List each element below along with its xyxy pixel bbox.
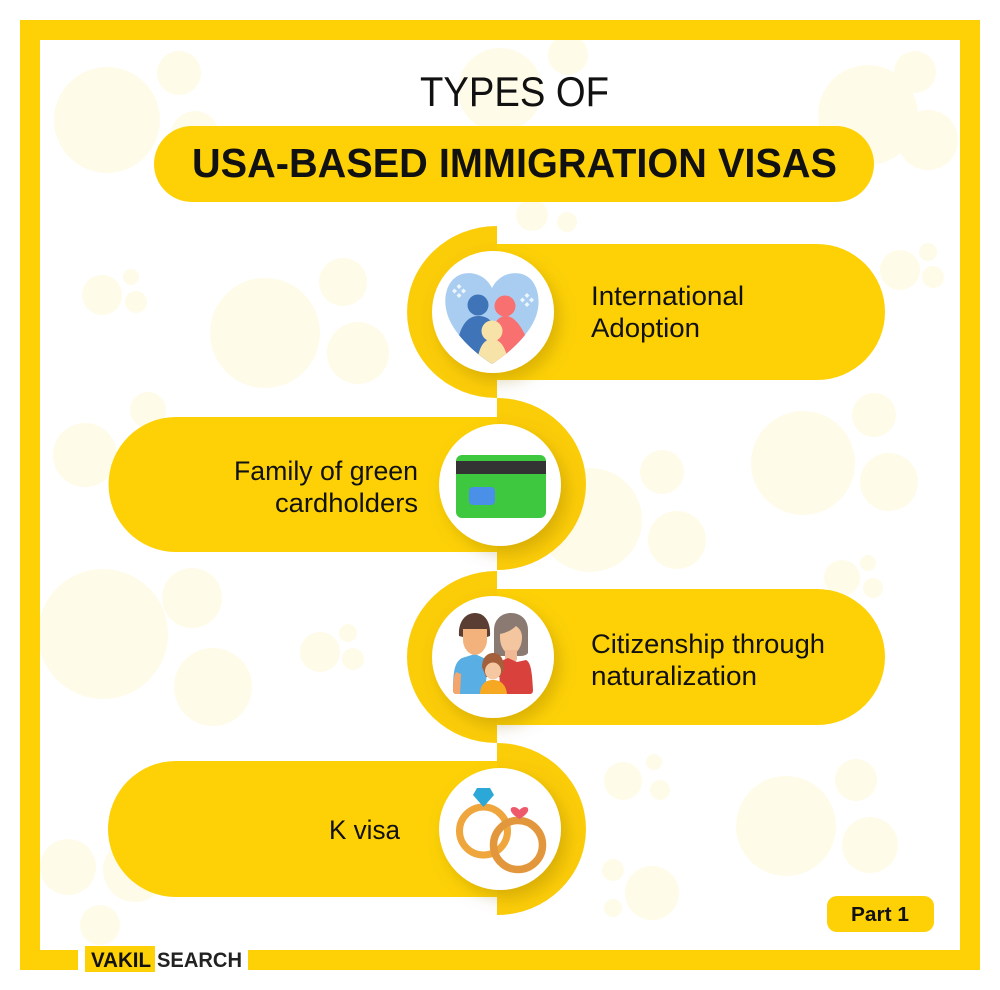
panel: international adoption	[407, 226, 885, 398]
heading banner	[154, 126, 874, 202]
icon: wedding rings	[460, 788, 542, 870]
panel: k visa	[108, 743, 586, 915]
label	[234, 456, 418, 518]
icon: family	[453, 613, 533, 694]
label	[591, 629, 825, 691]
badge: part 1: Part 1	[851, 904, 909, 926]
label	[591, 281, 744, 343]
badge: part 1	[827, 896, 934, 932]
label: K visa	[329, 815, 401, 845]
panel: family of green cardholders	[109, 398, 586, 570]
label: Family of green	[234, 456, 418, 486]
title: types of: TYPES OF	[420, 68, 609, 115]
logo: vakilsearch: VAKIL	[91, 949, 151, 972]
label: naturalization	[591, 661, 757, 691]
label: Citizenship through	[591, 629, 825, 659]
logo: vakilsearch: SEARCH	[157, 949, 242, 972]
label: Adoption	[591, 313, 700, 343]
icon: green card	[456, 455, 546, 518]
icon: family in heart	[445, 273, 539, 370]
panel: citizenship through naturalization	[407, 571, 885, 743]
heading banner: USA-BASED IMMIGRATION VISAS	[192, 140, 837, 186]
logo: vakilsearch	[85, 946, 242, 972]
label: International	[591, 281, 744, 311]
label: cardholders	[275, 488, 418, 518]
